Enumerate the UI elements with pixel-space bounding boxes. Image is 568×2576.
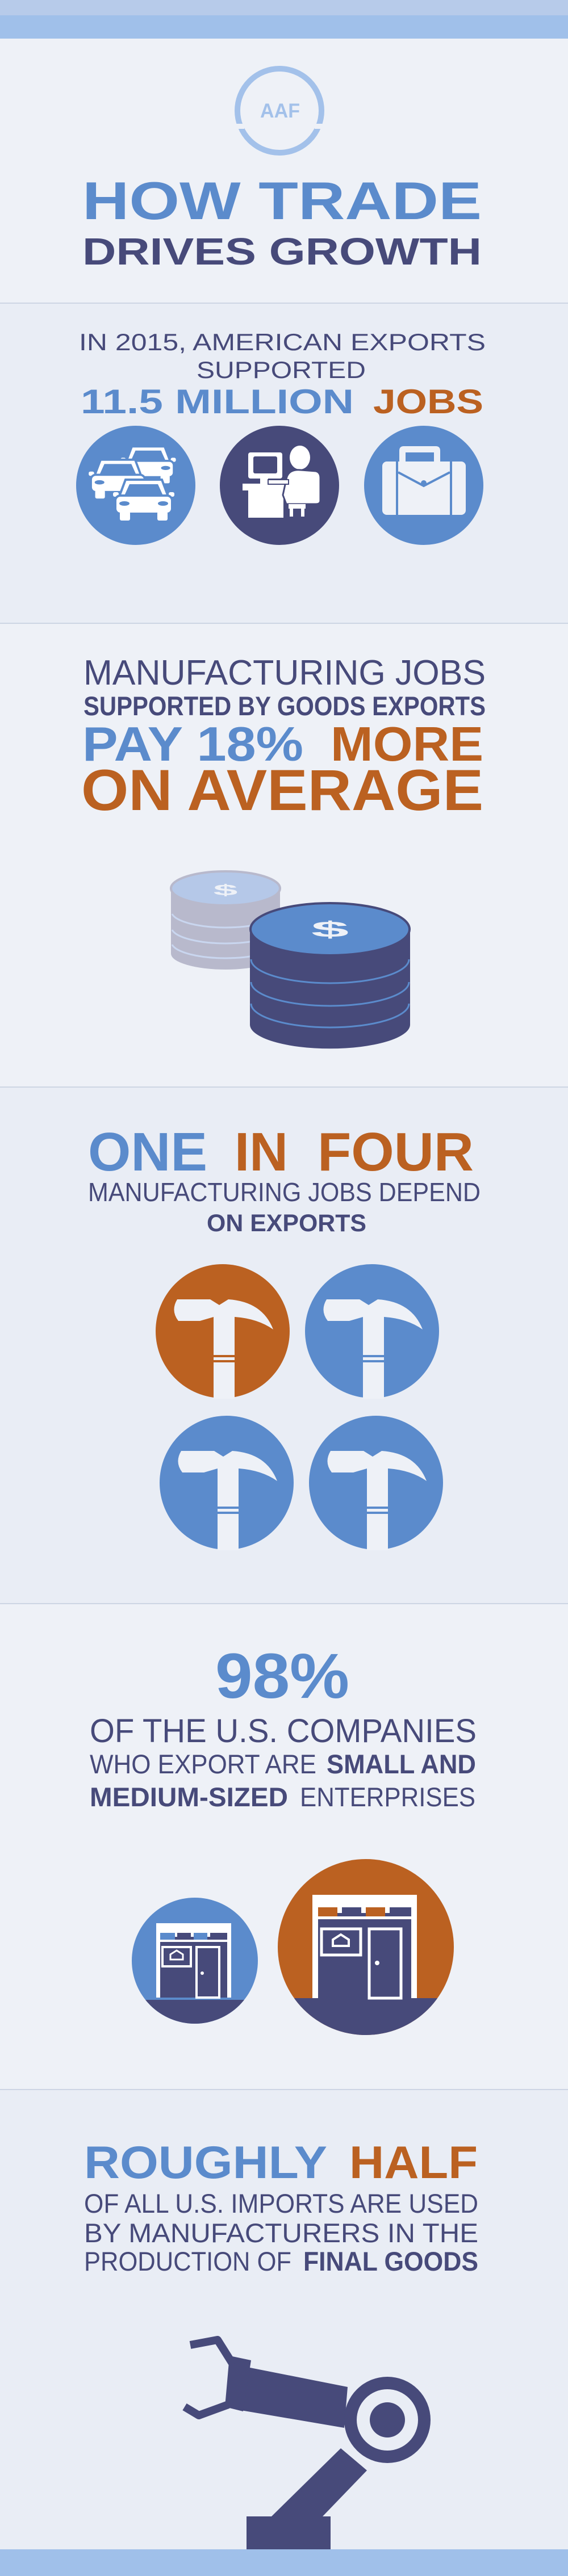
icon: coin stacks: $ xyxy=(214,882,237,899)
panel: exports jobs xyxy=(0,304,568,623)
heading: how trade: HOW TRADE xyxy=(82,171,482,230)
stat: one in four: ONE xyxy=(88,1122,207,1182)
icon: hammer orange xyxy=(156,1264,290,1399)
stat: roughly half: ROUGHLY xyxy=(84,2137,327,2188)
icon: coin stacks: $ xyxy=(311,917,349,942)
panel: one in four xyxy=(0,1088,568,1604)
panel: manufacturing pay xyxy=(0,624,568,1087)
stat: pay 18% more on average: PAY 18% xyxy=(82,718,303,771)
icon: small store xyxy=(132,1898,258,2024)
stat: 11.5 million jobs xyxy=(81,383,483,421)
stat: 11.5 million jobs: JOBS xyxy=(373,383,483,421)
stat: 98%: 98% xyxy=(215,1641,349,1711)
panel: small businesses xyxy=(90,1653,475,2035)
icon: hammer blue 3 xyxy=(309,1416,443,1550)
text: companies xyxy=(90,1713,477,1812)
stat: roughly half: HALF xyxy=(349,2137,478,2188)
text: in 2015: IN 2015, AMERICAN EXPORTS xyxy=(79,329,486,355)
text: companies: SMALL AND xyxy=(327,1749,476,1779)
stat: pay 18% more on average: ON AVERAGE xyxy=(81,758,483,823)
text: companies: ENTERPRISES xyxy=(300,1782,475,1812)
icon: AAF logo xyxy=(232,69,327,153)
text: companies: WHO EXPORT ARE xyxy=(90,1749,316,1779)
panel: one in four: ON EXPORTS xyxy=(207,1210,366,1237)
text: imports used: BY MANUFACTURERS IN THE xyxy=(84,2218,478,2248)
stat: one in four xyxy=(88,1122,474,1182)
bottom bar xyxy=(0,2549,568,2576)
text: manufacturing jobs depend: MANUFACTURING JOBS DEPEND xyxy=(88,1177,481,1207)
text: imports used xyxy=(84,2188,478,2276)
panel: imports xyxy=(0,2090,568,2549)
heading: drives growth: DRIVES GROWTH xyxy=(82,230,482,273)
panel: exports jobs: SUPPORTED xyxy=(197,356,366,383)
icon: large store xyxy=(278,1859,454,2035)
text: companies: OF THE U.S. COMPANIES xyxy=(90,1713,477,1750)
stat: 11.5 million jobs: 11.5 MILLION xyxy=(81,383,354,421)
stat: one in four: FOUR xyxy=(318,1122,474,1182)
icon: AAF logo: AAF xyxy=(260,100,300,122)
text: imports used: OF ALL U.S. IMPORTS ARE USED xyxy=(84,2188,478,2218)
icon: robot arm xyxy=(185,2340,431,2549)
stat: pay 18% more on average: MORE xyxy=(331,718,483,771)
text: imports used: FINAL GOODS xyxy=(303,2246,478,2276)
panel: manufacturing pay: SUPPORTED BY GOODS EXPORTS xyxy=(83,691,486,721)
text: companies: MEDIUM-SIZED xyxy=(90,1782,288,1812)
panel: title xyxy=(0,39,568,303)
text: imports used: PRODUCTION OF xyxy=(84,2246,291,2276)
icon: office worker xyxy=(220,426,339,545)
icon: hammer blue 1 xyxy=(305,1264,439,1399)
top bar xyxy=(0,0,568,39)
stat: pay 18% more on average xyxy=(81,718,483,823)
icon: briefcase xyxy=(364,426,483,545)
text: manufacturing jobs: MANUFACTURING JOBS xyxy=(83,653,486,693)
icon: coin stacks xyxy=(171,871,410,1048)
stat: one in four: IN xyxy=(235,1122,288,1182)
icon: cars xyxy=(76,426,195,545)
stat: roughly half xyxy=(84,2137,478,2188)
icon: hammer blue 2 xyxy=(160,1416,294,1550)
